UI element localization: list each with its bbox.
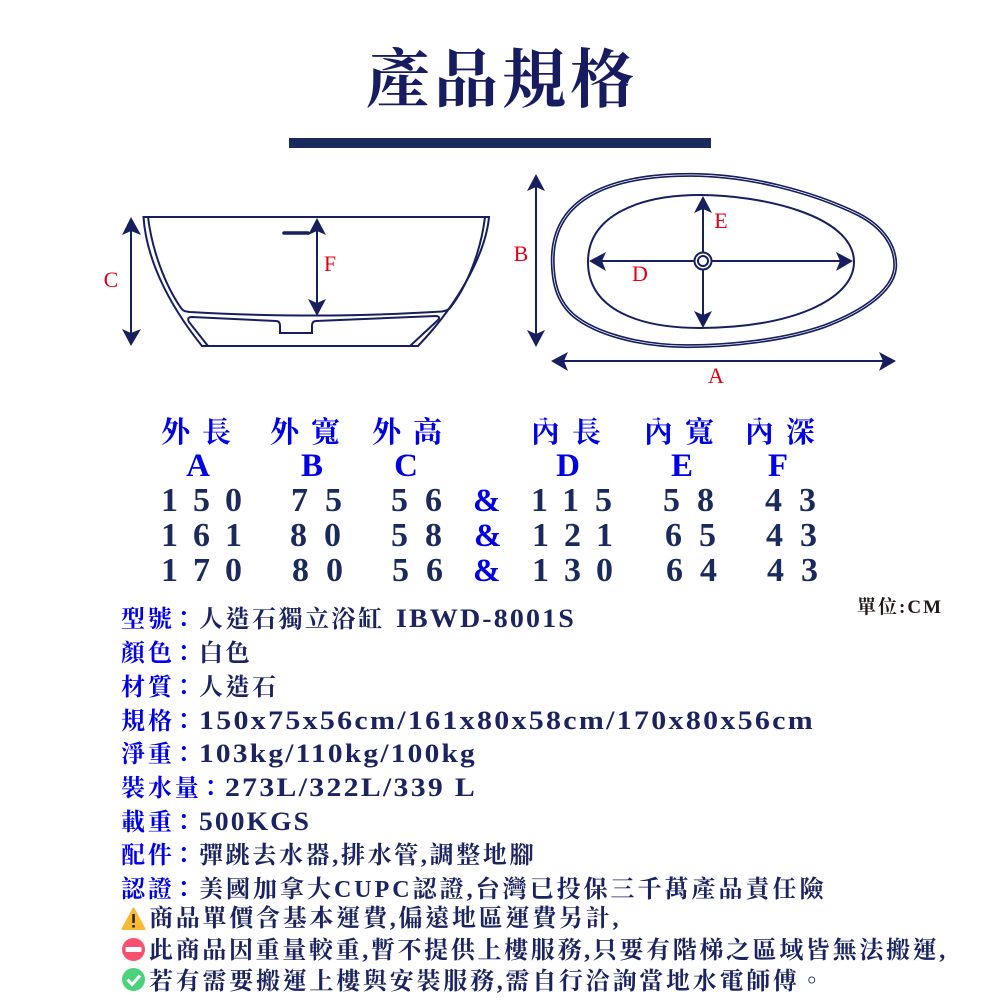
spec: net weight: 淨重： [121,741,199,768]
spec: colour: 顏色： [121,640,199,667]
spec: model: 人造石獨立浴缸 [199,606,384,633]
arrow E [694,196,712,328]
bathtub side outline [144,217,489,346]
table row 1: 56 [391,482,442,519]
table row 2: 121 [532,517,613,554]
table column letters: F [768,448,788,484]
arrow A [551,352,896,371]
table headers: 內深 [745,416,815,449]
label D: D [632,261,648,286]
icon: green check [122,968,145,991]
drain [694,252,712,270]
spec: certification: 美國加拿大CUPC認證,台灣已投保三千萬產品責任險 [199,876,826,903]
table row 2: 58 [391,517,442,554]
table row 1 [161,482,816,519]
table row 3: 170 [161,552,242,589]
note: shipping fee: 商品單價含基本運費,偏遠地區運費另計, [149,904,621,932]
arrow B [527,174,545,347]
arrow F [308,218,326,316]
table column letters: C [394,448,418,484]
table row 2: 43 [766,517,817,554]
table headers: 內長 [531,416,601,449]
spec: net weight: 103kg/110kg/100kg [199,739,477,768]
table row 1: & [473,483,500,519]
side view diagram of bathtub [104,217,489,346]
arrow D [589,252,853,271]
table row 1: 115 [531,482,612,519]
spec: certification: 認證： [121,876,199,903]
title: 產品規格 [366,45,634,116]
spec: colour: 白色 [199,640,252,667]
table headers [161,416,815,449]
spec: material: 材質： [121,674,199,701]
label A: A [708,363,724,388]
spec: material: 人造石 [199,674,278,701]
table column letters: A [186,448,210,484]
table headers: 外高 [372,416,442,449]
shipping notes [122,904,948,995]
spec: accessories: 配件： [121,842,199,869]
spec: material [121,674,278,701]
table row 1: 58 [663,482,714,519]
table row 2: 80 [290,517,341,554]
table row 3: 130 [532,552,613,589]
table row 2: & [474,518,502,554]
table column letters: D [556,448,580,484]
note: no upstairs delivery: 此商品因重量較重,暫不提供上樓服務,只要有階梯之區域皆無法搬運, [149,937,948,964]
spec: water capacity: 273L/322L/339 L [225,773,477,802]
title underline bar [289,138,711,148]
label E: E [714,208,728,233]
table row 1: 43 [765,482,816,519]
spec: load: 500KGS [199,807,311,836]
spec: water capacity: 裝水量： [121,775,226,802]
table column letters [186,448,788,484]
note: paid delivery: 若有需要搬運上樓與安裝服務,需自行洽詢當地水電師傅。 [149,968,826,995]
spec: size: 規格： [121,708,199,735]
table headers: 外寬 [270,416,340,449]
label F: F [324,251,336,276]
table row 3: 80 [292,552,343,589]
size table [161,416,818,589]
spec: colour [121,640,252,667]
spec: model [121,604,576,633]
spec: size: 150x75x56cm/161x80x58cm/170x80x56cm [199,706,815,735]
table headers: 內寬 [644,416,714,449]
table row 3: 64 [666,552,717,589]
spec: water capacity [121,773,477,802]
spec: model: IBWD-8001S [396,604,576,633]
label B: B [514,241,528,266]
spec: net weight [121,739,477,768]
specification list [121,604,826,903]
table column letters: E [671,448,693,484]
table column letters: B [301,448,323,484]
arrow C [122,217,141,346]
table row 3: 43 [767,552,818,589]
table row 2: 65 [665,517,716,554]
spec: accessories: 彈跳去水器,排水管,調整地腳 [199,842,536,869]
table row 1: 75 [291,482,342,519]
outer rim [553,175,895,346]
top view diagram of bathtub [514,174,896,388]
overflow handle [284,231,308,235]
inner basin [588,195,854,328]
label C: C [104,267,118,292]
table row 3 [161,552,818,589]
spec: load: 載重： [121,809,199,836]
spec: load [121,807,311,836]
spec: model: 型號： [121,606,199,633]
table row 2: 161 [161,517,242,554]
table row 3: 56 [392,552,443,589]
table row 2 [161,517,817,554]
table row 1: 150 [161,482,242,519]
icon: warning triangle [122,908,144,929]
table headers: 外長 [161,416,231,449]
unit note: 單位:CM [857,596,941,618]
icon: no entry [122,938,145,961]
table row 3: & [473,553,500,589]
